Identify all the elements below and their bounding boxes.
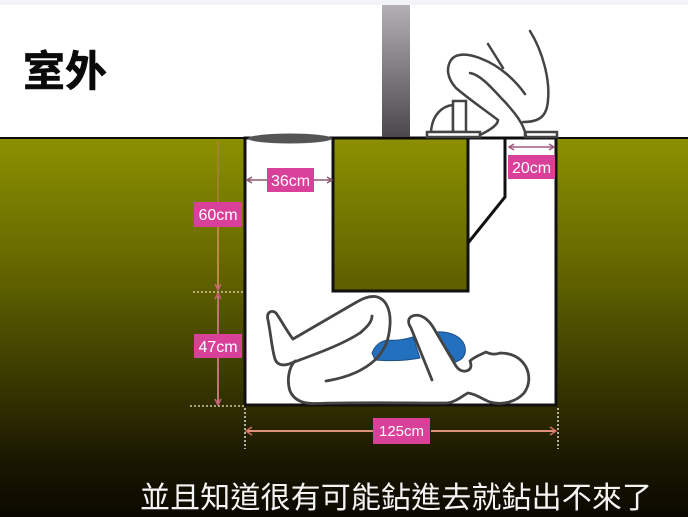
subtitle: 並且知道很有可能鉆進去就鉆出不來了	[140, 473, 652, 517]
label: 47cm: 47cm	[198, 339, 238, 356]
manhole cover	[248, 134, 332, 144]
label: 36cm: 36cm	[271, 173, 310, 190]
dimension: 36cm horizontal	[247, 177, 332, 183]
top stripe	[0, 0, 688, 5]
dimension: 125cm horizontal	[245, 408, 558, 449]
label: 60cm: 60cm	[198, 207, 238, 224]
dimension: 20cm horizontal	[509, 144, 554, 150]
label: 47cm	[194, 334, 242, 358]
lying figure	[268, 296, 529, 404]
pole	[382, 5, 410, 137]
dimension: 60cm / 47cm vertical	[190, 141, 245, 406]
underground chamber	[245, 138, 556, 405]
label: 125cm	[373, 418, 430, 444]
center ground block	[333, 138, 468, 291]
label: 60cm	[194, 202, 242, 227]
ground line	[0, 137, 688, 139]
label: 20cm	[508, 155, 555, 179]
squat toilet	[427, 101, 557, 137]
label: 20cm: 20cm	[512, 160, 551, 177]
blue backpack	[372, 332, 465, 362]
ground	[0, 139, 688, 517]
title: 室外	[23, 38, 107, 99]
label: 125cm: 125cm	[379, 423, 424, 440]
body and legs	[268, 296, 529, 404]
label: 36cm	[267, 168, 314, 192]
squatting figure	[448, 31, 548, 136]
